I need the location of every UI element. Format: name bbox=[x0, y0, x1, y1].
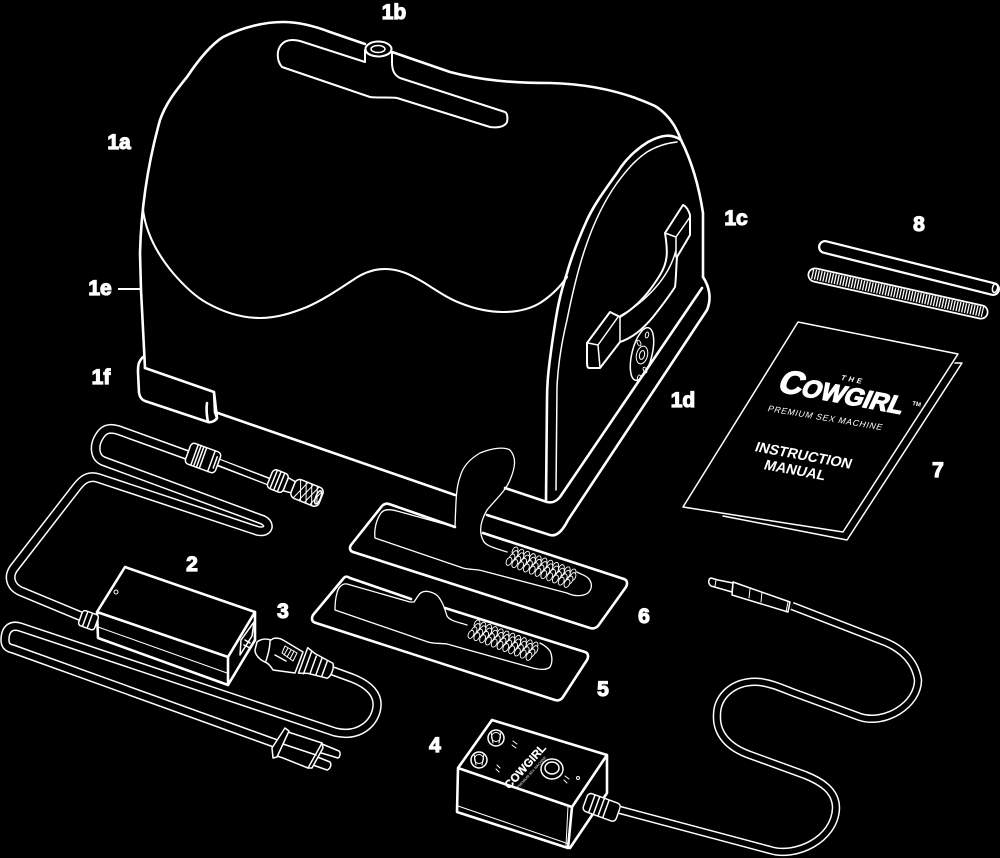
rod bbox=[825, 247, 999, 293]
labels: 4 bbox=[429, 734, 441, 757]
IEC plug bbox=[255, 638, 337, 684]
push button bbox=[541, 759, 563, 779]
ferrite bbox=[184, 442, 272, 483]
labels: 5 bbox=[597, 678, 609, 701]
labels: 8 bbox=[913, 213, 925, 236]
rear flange bbox=[626, 325, 658, 383]
labels: 1d bbox=[671, 389, 695, 412]
threaded rod bbox=[812, 274, 983, 312]
box logo: PREMIUM SEX MACHINE bbox=[516, 755, 548, 789]
instruction manual: TM bbox=[912, 401, 921, 409]
instruction manual bbox=[683, 322, 962, 540]
labels: 3 bbox=[277, 600, 289, 623]
nodules bbox=[505, 546, 577, 588]
plate bbox=[350, 504, 627, 628]
manual logo: COWGIRL bbox=[773, 364, 913, 421]
foot bbox=[138, 357, 217, 422]
cord boot bbox=[582, 792, 621, 822]
US plug bbox=[272, 728, 340, 770]
attachment 5 bbox=[312, 577, 588, 700]
plate bbox=[312, 577, 588, 700]
labels: 2 bbox=[186, 553, 198, 576]
cable bbox=[11, 429, 268, 618]
audio cable bbox=[620, 578, 918, 852]
labels: 1f bbox=[92, 366, 111, 389]
control box bbox=[457, 720, 621, 848]
connecting cable with connectors bbox=[11, 429, 325, 618]
power adapter bbox=[78, 567, 255, 685]
instruction manual: THE bbox=[839, 373, 867, 386]
labels: 1c bbox=[724, 207, 748, 230]
side cap arcs bbox=[546, 136, 681, 500]
slot bbox=[278, 40, 507, 127]
labels: 6 bbox=[638, 605, 650, 628]
machine body bbox=[138, 22, 710, 535]
knob bbox=[488, 730, 504, 746]
box logo: COWGIRL bbox=[503, 742, 549, 792]
labels bbox=[88, 1, 944, 757]
manual heading: INSTRUCTION bbox=[753, 440, 854, 473]
nodules bbox=[467, 619, 539, 661]
threaded connector bbox=[266, 469, 325, 508]
shaft ring bbox=[366, 42, 392, 56]
base plate edges bbox=[215, 277, 710, 535]
power cord bbox=[5, 626, 377, 770]
handle bbox=[587, 205, 690, 368]
labels: 1e bbox=[88, 277, 112, 300]
leader line 1e bbox=[118, 288, 140, 290]
instruction manual: MANUAL bbox=[762, 458, 828, 484]
strain relief bbox=[78, 610, 99, 631]
silicone shape bbox=[335, 584, 552, 669]
attachment 6 bbox=[350, 448, 627, 628]
labels: 1b bbox=[382, 1, 406, 24]
labels: 7 bbox=[932, 459, 944, 482]
labels: 1a bbox=[107, 131, 131, 154]
jack plug bbox=[709, 578, 790, 612]
knob bbox=[471, 752, 487, 768]
seat edge wave bbox=[143, 210, 567, 318]
instruction manual: PREMIUM SEX MACHINE bbox=[766, 404, 885, 432]
body outline bbox=[140, 22, 703, 368]
silicone shape bbox=[375, 448, 591, 596]
